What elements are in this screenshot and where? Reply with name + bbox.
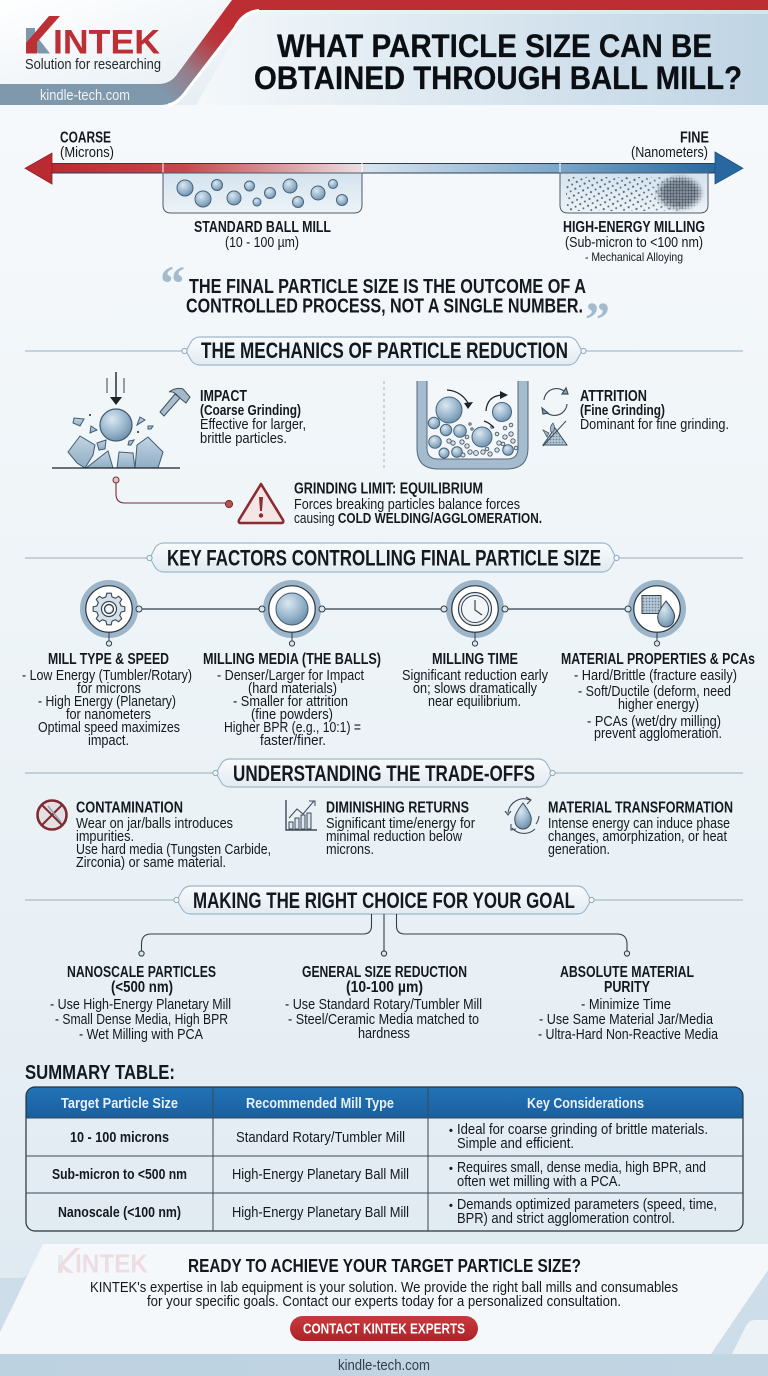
panel: impact bbox=[52, 372, 306, 468]
standard ball mill label: STANDARD BALL MILL bbox=[194, 219, 331, 236]
material transformation text: changes, amorphization, or heat bbox=[548, 829, 727, 845]
icon: ball bbox=[259, 583, 325, 646]
material properties text: - Soft/Ductile (deform, need bbox=[578, 684, 731, 700]
scale end labels: COARSE bbox=[60, 130, 111, 146]
table row: nanoscale bbox=[58, 1197, 717, 1227]
footer bbox=[0, 1354, 768, 1376]
material properties text: - Hard/Brittle (fracture easily) bbox=[574, 668, 737, 684]
trade-off: diminishing returns bbox=[286, 800, 475, 858]
goal: general size reduction: - Steel/Ceramic Media matched to bbox=[288, 1012, 479, 1028]
call-to-action text: for your specific goals. Contact our experts today for a personalized consultation. bbox=[147, 1293, 621, 1310]
mill type text: for nanometers bbox=[66, 707, 151, 723]
standard ball mill range box bbox=[163, 173, 362, 213]
milling media text bbox=[203, 651, 381, 749]
milling time text: MILLING TIME bbox=[432, 651, 518, 668]
high-energy range box bbox=[560, 173, 708, 213]
table row: nanoscale: High-Energy Planetary Ball Mill bbox=[232, 1205, 409, 1221]
diminishing returns text: microns. bbox=[326, 842, 374, 858]
closing quote mark: ” bbox=[585, 291, 610, 347]
mill type text: for microns bbox=[77, 681, 141, 697]
goal: general size reduction: hardness bbox=[358, 1026, 410, 1042]
section heading: right choice: MAKING THE RIGHT CHOICE FOR YOUR GOAL bbox=[193, 888, 575, 913]
milling time text: Significant reduction early bbox=[402, 668, 549, 684]
mill type text bbox=[22, 651, 192, 749]
milling time text bbox=[402, 651, 549, 710]
goal: material purity: - Minimize Time bbox=[581, 997, 671, 1013]
material properties text: - PCAs (wet/dry milling) bbox=[587, 714, 721, 730]
icon: cycle arrows bbox=[542, 388, 568, 415]
section heading: key factors bbox=[25, 543, 743, 572]
goal: general size reduction: - Use Standard Rotary/Tumbler Mill bbox=[285, 997, 482, 1013]
attrition text: (Fine Grinding) bbox=[580, 403, 665, 419]
table row: 10-100 microns bbox=[70, 1122, 708, 1152]
table row: sub-micron: Requires small, dense media, high BPR, and bbox=[457, 1160, 706, 1176]
attrition text: ATTRITION bbox=[580, 388, 647, 405]
pull quote: THE FINAL PARTICLE SIZE IS THE OUTCOME OF A bbox=[189, 275, 586, 298]
table row: sub-micron: • bbox=[449, 1163, 453, 1175]
impact text: brittle particles. bbox=[200, 431, 287, 447]
high-energy milling label: (Sub-micron to <100 nm) bbox=[565, 235, 703, 251]
factor: mill type and speed bbox=[22, 583, 192, 749]
goal: nanoscale: - Wet Milling with PCA bbox=[79, 1027, 203, 1043]
attrition text bbox=[580, 388, 729, 433]
trade-off: material transformation bbox=[505, 797, 733, 858]
diminishing returns text: minimal reduction below bbox=[326, 829, 462, 845]
trade-off: contamination bbox=[38, 800, 271, 871]
goal: nanoscale: (<500 nm) bbox=[111, 979, 173, 996]
table row: nanoscale: Nanoscale (<100 nm) bbox=[58, 1205, 181, 1221]
attrition text: Dominant for fine grinding. bbox=[580, 417, 729, 433]
table row: nanoscale: Demands optimized parameters (speed, time, bbox=[457, 1197, 717, 1213]
pull quote: CONTROLLED PROCESS, NOT A SINGLE NUMBER. bbox=[186, 294, 583, 318]
goal: general size reduction: (10-100 µm) bbox=[346, 979, 423, 996]
section heading: trade-offs bbox=[25, 759, 743, 787]
summary table bbox=[26, 1087, 743, 1231]
goal: nanoscale: NANOSCALE PARTICLES bbox=[67, 964, 216, 981]
footer: kindle-tech.com bbox=[338, 1357, 430, 1374]
table row: 10-100 microns: Standard Rotary/Tumbler Mill bbox=[236, 1130, 405, 1146]
diminishing returns text: Significant time/energy for bbox=[326, 816, 475, 832]
table row: sub-micron bbox=[52, 1160, 706, 1190]
logo bbox=[25, 16, 161, 73]
call-to-action text: KINTEK's expertise in lab equipment is your solution. We provide the right ball mills and consumables bbox=[90, 1279, 678, 1296]
table header row: Target Particle Size bbox=[61, 1095, 178, 1112]
table header row: Key Considerations bbox=[527, 1095, 644, 1112]
contamination text bbox=[76, 800, 271, 871]
goal: material purity: - Ultra-Hard Non-Reactive Media bbox=[538, 1027, 719, 1043]
mill type text: Optimal speed maximizes bbox=[38, 720, 180, 736]
factor: milling media bbox=[203, 583, 381, 749]
opening quote mark: “ bbox=[160, 255, 185, 311]
standard ball mill label: (10 - 100 µm) bbox=[225, 235, 299, 251]
call-to-action panel bbox=[0, 1244, 768, 1354]
contamination text: CONTAMINATION bbox=[76, 800, 183, 816]
goal: material purity: ABSOLUTE MATERIAL bbox=[560, 964, 694, 981]
contamination text: Zirconia) or same material. bbox=[76, 855, 226, 871]
milling media text: MILLING MEDIA (THE BALLS) bbox=[203, 651, 381, 668]
table row: 10-100 microns: Ideal for coarse grinding of brittle materials. bbox=[457, 1122, 708, 1138]
icon: powder pile bbox=[543, 421, 567, 446]
goal: material purity: - Use Same Material Jar/Media bbox=[539, 1012, 714, 1028]
milling media text: (hard materials) bbox=[248, 681, 337, 697]
connector bbox=[116, 483, 226, 503]
table row: nanoscale: • bbox=[449, 1200, 453, 1212]
table row: 10-100 microns: Simple and efficient. bbox=[457, 1136, 574, 1152]
table row: 10-100 microns: • bbox=[449, 1125, 453, 1137]
section heading: mechanics bbox=[25, 337, 743, 365]
logo: Solution for researching bbox=[25, 57, 161, 73]
header banner bbox=[0, 0, 768, 105]
goal: nanoscale: - Use High-Energy Planetary Mill bbox=[50, 997, 231, 1013]
goal: material purity bbox=[538, 964, 719, 1043]
call-to-action text bbox=[90, 1255, 678, 1310]
section heading: right choice bbox=[25, 886, 743, 914]
table row: sub-micron: High-Energy Planetary Ball Mill bbox=[232, 1167, 409, 1183]
impact text: Effective for larger, bbox=[200, 417, 306, 433]
grinding limit text: causing COLD WELDING/AGGLOMERATION. bbox=[294, 511, 542, 527]
icon: material and droplet bbox=[625, 583, 683, 646]
material properties text: higher energy) bbox=[618, 697, 699, 713]
icon: droplet with cycle arrows bbox=[505, 797, 539, 833]
material properties text: prevent agglomeration. bbox=[594, 726, 722, 742]
impact text: (Coarse Grinding) bbox=[200, 403, 301, 419]
material transformation text: generation. bbox=[548, 842, 610, 858]
goal: nanoscale bbox=[50, 964, 231, 1043]
mill type text: MILL TYPE & SPEED bbox=[48, 651, 169, 668]
watermark logo: INTEK bbox=[75, 1248, 148, 1278]
scale end labels: FINE bbox=[680, 130, 709, 146]
pull quote bbox=[160, 255, 610, 347]
icon: contamination prohibited bbox=[38, 800, 66, 830]
goal: material purity: PURITY bbox=[604, 979, 651, 996]
scale arrow bbox=[25, 152, 743, 184]
table header row: Recommended Mill Type bbox=[246, 1095, 394, 1112]
goal: general size reduction: GENERAL SIZE REDUCTION bbox=[302, 964, 467, 981]
material transformation text bbox=[548, 800, 733, 858]
button: contact experts bbox=[290, 1316, 478, 1341]
milling media text: Higher BPR (e.g., 10:1) = bbox=[224, 720, 361, 736]
title: WHAT PARTICLE SIZE CAN BE bbox=[277, 28, 712, 64]
grinding limit text: GRINDING LIMIT: EQUILIBRIUM bbox=[294, 480, 483, 498]
icon: gear bbox=[83, 583, 142, 646]
icon: chart bbox=[286, 800, 317, 830]
mill type text: - High Energy (Planetary) bbox=[38, 694, 176, 710]
table row: sub-micron: Sub-micron to <500 nm bbox=[52, 1167, 187, 1183]
button: contact experts: CONTACT KINTEK EXPERTS bbox=[303, 1320, 465, 1338]
impact text: IMPACT bbox=[200, 388, 247, 405]
high-energy milling label bbox=[563, 219, 705, 264]
icon: clock bbox=[441, 583, 508, 646]
high-energy milling label: HIGH-ENERGY MILLING bbox=[563, 219, 705, 236]
contamination text: Wear on jar/balls introduces bbox=[76, 816, 233, 832]
milling media text: - Smaller for attrition bbox=[233, 694, 348, 710]
table row: nanoscale: BPR) and strict agglomeration control. bbox=[457, 1211, 675, 1227]
website label: kindle-tech.com bbox=[40, 87, 130, 104]
factor: material properties bbox=[561, 583, 755, 742]
goal branch connectors bbox=[139, 914, 630, 956]
logo mark K bbox=[26, 16, 60, 54]
milling media text: faster/finer. bbox=[260, 733, 326, 749]
scale end labels: (Nanometers) bbox=[631, 145, 708, 161]
milling time text: near equilibrium. bbox=[428, 694, 521, 710]
logo: INTEK bbox=[53, 24, 160, 62]
icon: milling jar bbox=[417, 381, 528, 469]
milling media text: - Denser/Larger for Impact bbox=[217, 668, 364, 684]
panel: attrition bbox=[417, 381, 729, 469]
milling time text: on; slows dramatically bbox=[413, 681, 538, 697]
factor timeline connector bbox=[142, 608, 625, 610]
milling media text: (fine powders) bbox=[251, 707, 333, 723]
material properties text bbox=[561, 651, 755, 742]
diminishing returns text bbox=[326, 800, 475, 858]
section heading: mechanics: THE MECHANICS OF PARTICLE REDUCTION bbox=[201, 338, 568, 363]
goal: nanoscale: - Small Dense Media, High BPR bbox=[55, 1012, 228, 1028]
material transformation text: Intense energy can induce phase bbox=[548, 816, 730, 832]
summary table heading: SUMMARY TABLE: bbox=[25, 1062, 175, 1084]
table row: sub-micron: often wet milling with a PCA. bbox=[457, 1174, 621, 1190]
table row: 10-100 microns: 10 - 100 microns bbox=[70, 1130, 169, 1146]
diminishing returns text: DIMINISHING RETURNS bbox=[326, 800, 469, 816]
standard ball mill label bbox=[194, 219, 331, 251]
callout: grinding limit bbox=[113, 477, 542, 527]
icon: ball impact on rocks bbox=[52, 372, 180, 468]
scale: coarse to fine bbox=[25, 130, 743, 264]
icon: hammer bbox=[160, 388, 190, 416]
contamination text: impurities. bbox=[76, 829, 134, 845]
scale end labels bbox=[60, 130, 709, 161]
goal: general size reduction bbox=[285, 964, 482, 1042]
factor: milling time bbox=[402, 583, 549, 710]
impact text bbox=[200, 388, 306, 447]
title bbox=[254, 28, 742, 96]
mill type text: - Low Energy (Tumbler/Rotary) bbox=[22, 668, 192, 684]
high-energy milling label: - Mechanical Alloying bbox=[585, 250, 683, 264]
section heading: trade-offs: UNDERSTANDING THE TRADE-OFFS bbox=[233, 761, 535, 786]
grinding limit text bbox=[294, 480, 542, 527]
icon: warning triangle bbox=[239, 484, 283, 523]
call-to-action text: READY TO ACHIEVE YOUR TARGET PARTICLE SIZE? bbox=[188, 1255, 581, 1276]
section heading: key factors: KEY FACTORS CONTROLLING FINAL PARTICLE SIZE bbox=[167, 546, 601, 570]
scale end labels: (Microns) bbox=[60, 145, 114, 161]
grinding limit text: Forces breaking particles balance forces bbox=[294, 497, 520, 513]
mill type text: impact. bbox=[88, 733, 129, 749]
contamination text: Use hard media (Tungsten Carbide, bbox=[76, 842, 271, 858]
table header row bbox=[26, 1087, 743, 1118]
